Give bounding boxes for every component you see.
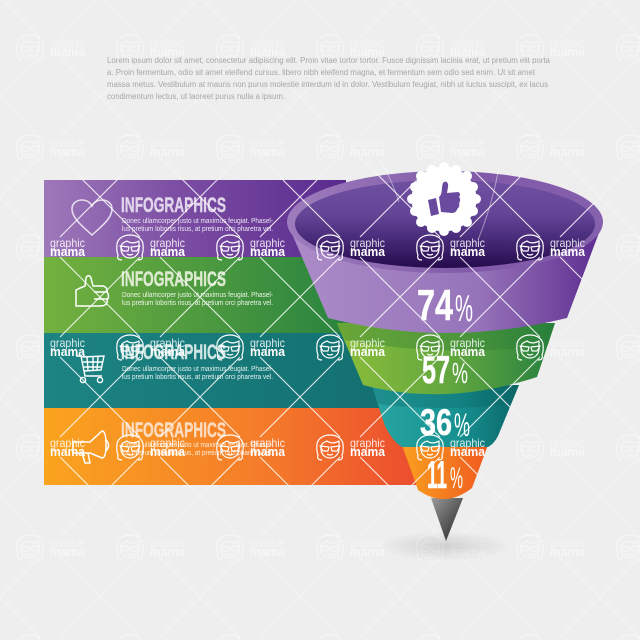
- label: 11%: 11: [427, 454, 447, 497]
- label: 36%: %: [454, 407, 470, 443]
- faint highlight arcs: [380, 160, 498, 240]
- heading: orange bar: INFOGRAPHICS: [121, 419, 226, 442]
- funnel tier: green: [337, 323, 555, 394]
- funnel: [287, 160, 603, 561]
- text: orange bar: Donec ullamcorper justo ut maximus feugiat. Phasel-: [122, 440, 273, 449]
- intro paragraph: massa metus. Vestibulum at mauris non purus molestie interdum id in dolor. Vestibulum feugiat, nibh ut luctus suscipit, ex lacus: [107, 80, 548, 89]
- text: orange bar: [122, 440, 273, 457]
- text: purple bar: lus pretium lobortis risus, at pretium orci pharetra vel.: [122, 224, 273, 233]
- label: 57%: %: [452, 358, 468, 390]
- text: green bar: Donec ullamcorper justo ut maximus feugiat. Phasel-: [122, 290, 273, 299]
- panel: purple bar: [44, 180, 346, 257]
- panel: teal bar: [44, 333, 400, 408]
- heading: green bar: INFOGRAPHICS: [121, 268, 226, 291]
- intro paragraph: condimentum lectus, ut laoreet purus nulla a ipsum.: [107, 92, 285, 101]
- intro paragraph: [107, 56, 551, 101]
- icon: megaphone: [73, 431, 108, 463]
- icon: heart: [72, 200, 112, 235]
- icon: thumb hand: [76, 276, 108, 306]
- text: orange bar: lus pretium lobortis risus, at pretium orci pharetra vel.: [122, 448, 273, 457]
- heading: purple bar: INFOGRAPHICS: [121, 194, 226, 217]
- watermark on colored shapes: [50, 171, 594, 485]
- intro paragraph: a. Proin fermentum, odio sit amet eleifend cursus, libero nibh eleifend magna, et fermentum sem odio sed enim. Ut sit amet: [107, 68, 536, 77]
- label: 74%: 74: [417, 281, 453, 330]
- text: green bar: lus pretium lobortis risus, at pretium orci pharetra vel.: [122, 298, 273, 307]
- funnel tier: teal: [372, 385, 519, 447]
- text: purple bar: [122, 216, 273, 233]
- funnel tier: orange: [402, 445, 488, 499]
- icon: shopping cart: [76, 356, 104, 383]
- text: teal bar: lus pretium lobortis risus, at pretium orci pharetra vel.: [122, 372, 273, 381]
- panel: orange bar: [44, 408, 420, 485]
- funnel: %: [450, 462, 463, 495]
- text: green bar: [122, 290, 273, 307]
- text: teal bar: [122, 364, 273, 381]
- funnel tip: [431, 498, 463, 541]
- intro paragraph: Lorem ipsum dolor sit amet, consectetur adipiscing elit. Proin vitae tortor tortor. Fusce dignissim lacinia erat, ut pretium elit porta: [107, 56, 551, 65]
- panel: green bar: [44, 257, 370, 333]
- label: 74%: %: [455, 288, 473, 330]
- text: teal bar: Donec ullamcorper justo ut maximus feugiat. Phasel-: [122, 364, 273, 373]
- label: 36%: 36: [420, 402, 452, 443]
- funnel ground shadow: [379, 531, 511, 561]
- text: purple bar: Donec ullamcorper justo ut maximus feugiat. Phasel-: [122, 216, 273, 225]
- label: 57%: 57: [422, 349, 450, 392]
- funnel tier: purple: [287, 171, 603, 333]
- icon: thumbs-up badge: [407, 162, 481, 236]
- heading: teal bar: INFOGRAPHICS: [121, 341, 226, 364]
